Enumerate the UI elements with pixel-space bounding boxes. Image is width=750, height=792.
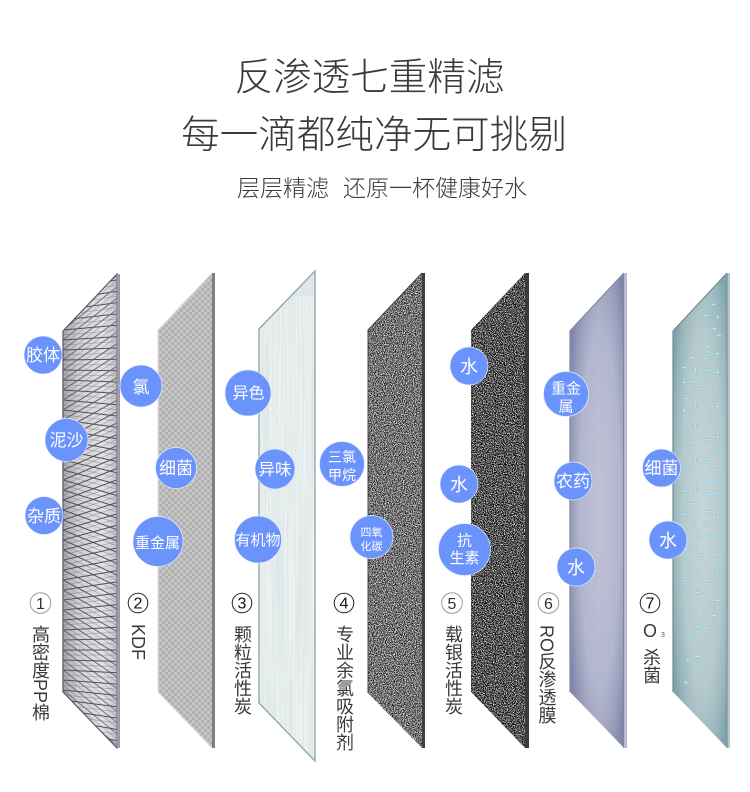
bubble: 水 (layer 5, middle): 水 [450,475,468,495]
bubble: 有机物: 有机物 [235,532,281,549]
bubble: 重金属 (layer 6): 属 [558,398,574,416]
bubble: 细菌 [156,448,196,488]
bubble: 水 (layer 6): 水 [567,558,585,578]
label 2: KDF: 2 [134,596,143,613]
label 3: 颗粒活性炭: 3 [238,596,247,613]
bubble: 胶体 [24,336,62,374]
label 6: RO反渗透膜 [536,593,559,724]
bubble: 重金属 (layer 6) [544,372,588,416]
label 6: RO反渗透膜: 6 [544,596,553,613]
bubble: 异色: 异色 [232,384,265,402]
filter layer 7: ozone sterilisation [673,273,730,748]
bubble: 细菌 (layer 7): 细菌 [644,459,678,478]
label 2: KDF: KDF [128,624,148,660]
bubble: 四氧化碳: 四氧 [360,525,382,539]
water bubbles [683,302,721,684]
bubble: 三氯甲烷: 三氯 [328,449,356,465]
bubble: 重金属 [133,516,183,566]
bubble: 杂质 [25,496,63,534]
label 5: 载银活性炭 [442,593,463,715]
bubble: 抗生素: 生素 [449,550,480,567]
label 6: RO反渗透膜: RO反渗透膜 [536,625,556,724]
filter layer 5: silver-loaded activated carbon [471,273,529,748]
bubble: 胶体: 胶体 [26,346,60,365]
label 7: O3 杀菌: 7 [646,596,655,613]
bubble: 重金属 (layer 6): 重金 [551,380,581,398]
label 2: KDF [128,593,148,660]
filter layer 2: KDF [158,273,215,748]
label 4: 专业余氯吸附剂: 专业余氯吸附剂 [334,625,354,751]
subtitle: 层层精滤 [237,175,329,201]
bubble: 细菌: 细菌 [159,459,193,478]
subtitle: 还原一杯健康好水 [343,175,527,201]
bubble: 三氯甲烷 [320,442,364,486]
label 3: 颗粒活性炭: 颗粒活性炭 [232,625,252,715]
bubble: 水 (layer 5, top): 水 [460,357,478,377]
label 4: 专业余氯吸附剂: 4 [340,596,349,613]
bubble: 杂质: 杂质 [27,507,61,526]
bubble: 泥沙 [45,418,88,462]
title [181,56,567,157]
bubble: 水 (layer 5, middle) [440,465,478,503]
bubble: 异味: 异味 [258,460,292,479]
bubble: 三氯甲烷: 甲烷 [328,467,356,483]
bubble: 氯: 氯 [132,378,150,397]
filter layer 4: residual chlorine adsorbent [368,273,425,748]
label 7: O3 杀菌: 3 [661,632,665,639]
bubble: 重金属: 重金属 [135,535,180,552]
bubble: 农药 [554,462,592,500]
label 5: 载银活性炭: 5 [448,596,457,613]
bubble: 水 (layer 7): 水 [659,531,677,551]
bubble: 农药: 农药 [556,472,590,491]
title: 每一滴都纯净无可挑剔 [181,114,567,157]
bubble: 抗生素 [438,524,490,576]
label 5: 载银活性炭: 载银活性炭 [443,625,463,715]
filter layer 6: RO membrane [570,273,627,748]
bubble: 泥沙: 泥沙 [50,431,84,450]
bubble: 氯 [120,365,162,407]
label 7: O3 杀菌: 杀菌 [641,648,661,684]
bubble: 四氧化碳 [350,516,393,558]
bubble: 细菌 (layer 7) [642,449,680,487]
bubble: 异色 [225,370,271,416]
filter layer 1: PP cotton mesh [63,257,120,750]
bubble: 异味 [255,449,295,489]
bubble: 抗生素: 抗 [457,532,472,550]
bubble: 水 (layer 5, top) [450,347,488,385]
bubble: 水 (layer 6) [557,548,595,586]
label 7: O3 杀菌: O [643,621,657,641]
bubble: 有机物 [234,516,282,563]
label 1: 高密度PP棉: 1 [36,596,45,613]
title: 反渗透七重精滤 [234,56,505,100]
bubble: 水 (layer 7) [649,521,687,559]
filter layer 3: granular activated carbon [259,271,315,761]
bubble: 四氧化碳: 化碳 [360,539,382,553]
label 7: O3 杀菌 [640,593,665,684]
subtitle [237,175,527,201]
label 1: 高密度PP棉: 高密度PP棉 [30,625,50,721]
